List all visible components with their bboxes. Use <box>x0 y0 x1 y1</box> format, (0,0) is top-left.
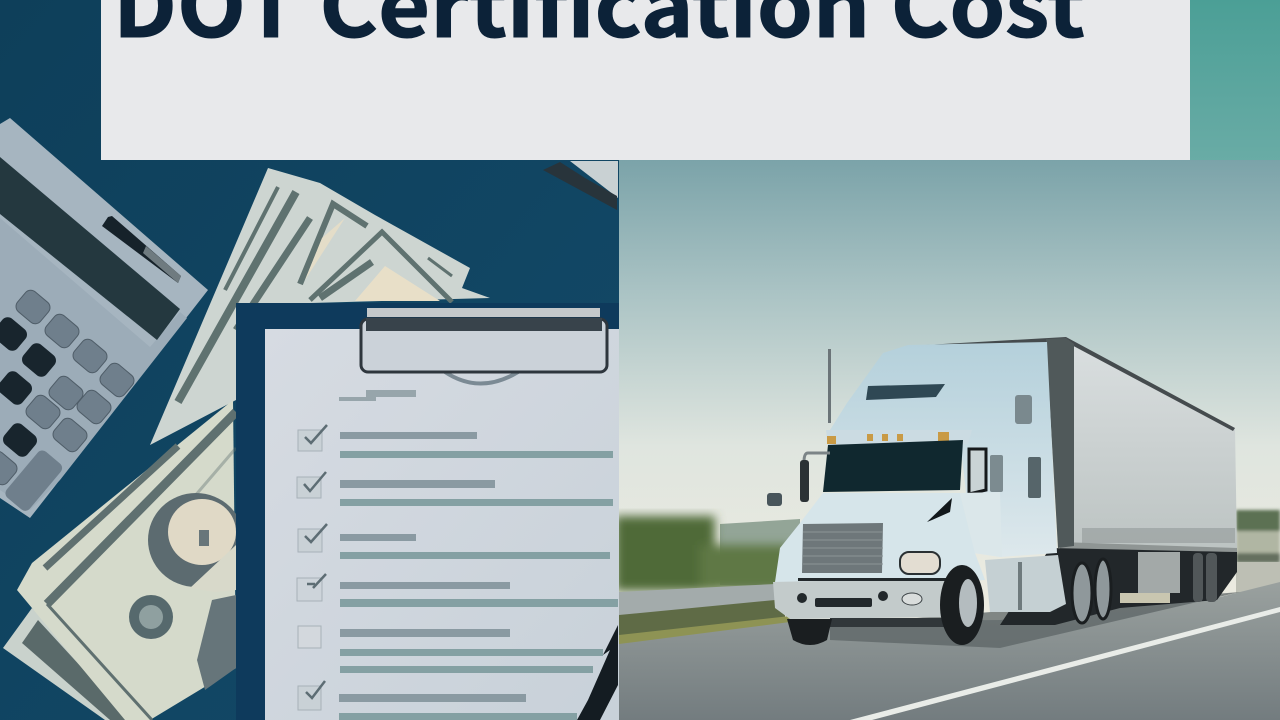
amber lights <box>827 432 949 444</box>
row 6 <box>298 681 577 720</box>
clip top <box>367 308 600 317</box>
pen <box>577 625 618 720</box>
heading line <box>339 390 416 401</box>
cab upper <box>830 342 1057 557</box>
front right wheel <box>940 565 984 645</box>
seal <box>129 595 173 639</box>
background: teal corner <box>619 0 1280 165</box>
checklist rows <box>297 425 618 720</box>
hood <box>775 493 985 585</box>
trailer bottom rail <box>1060 542 1237 552</box>
row 4 <box>297 574 618 607</box>
warm paper patches <box>355 266 440 301</box>
display <box>0 157 180 340</box>
side step <box>1120 593 1170 603</box>
calculator <box>0 118 208 518</box>
rear wheels <box>1193 553 1203 602</box>
bill border bands <box>45 412 236 720</box>
row 3 <box>298 524 610 559</box>
bumper <box>773 578 955 619</box>
board <box>236 303 619 720</box>
keys <box>0 287 137 488</box>
trailer pillar <box>1046 338 1074 548</box>
antenna <box>828 349 831 423</box>
truck <box>767 337 1240 648</box>
clipboard <box>236 303 619 720</box>
clip dark band <box>366 318 602 331</box>
trailer roof edge <box>908 337 1235 431</box>
large key <box>3 448 65 513</box>
clip wire shadow <box>445 372 518 384</box>
row 1 <box>298 425 613 458</box>
side window lower <box>1028 457 1041 498</box>
headlight <box>900 552 940 574</box>
underside <box>1000 548 1237 625</box>
background: navy desk <box>0 0 619 720</box>
door mirror <box>990 455 1003 492</box>
upper bill stripes <box>178 187 452 402</box>
title panel <box>101 0 1190 160</box>
calculator body <box>0 118 208 518</box>
hood vent <box>927 498 952 522</box>
solar slot <box>102 216 181 283</box>
upper bills <box>150 168 490 445</box>
side panel <box>1138 552 1180 593</box>
truck shadow <box>830 592 1240 648</box>
roof vent <box>866 384 945 400</box>
portrait <box>148 493 244 587</box>
bumper slot <box>815 598 872 607</box>
under bumper <box>830 618 950 627</box>
row 2 <box>297 472 613 506</box>
door <box>960 492 1002 557</box>
lane stripe <box>850 607 1280 720</box>
clip <box>361 319 607 372</box>
paper <box>265 329 619 720</box>
keypad deck <box>0 218 187 510</box>
panel: highway photo <box>615 160 1280 720</box>
drive wheels <box>1072 563 1092 623</box>
windshield <box>823 440 963 492</box>
torn item <box>543 161 618 210</box>
cash fan <box>3 161 618 720</box>
trailer box <box>1066 338 1237 552</box>
left mirror <box>804 453 830 462</box>
front left wheel <box>787 619 832 645</box>
grille <box>802 523 883 573</box>
back lower bill <box>3 608 140 720</box>
trailer marks <box>1082 528 1235 543</box>
steps and tanks <box>985 555 1066 612</box>
door window <box>969 449 986 494</box>
row 5 <box>298 626 603 673</box>
visor <box>826 430 972 446</box>
side window <box>1015 395 1032 424</box>
main lower bills <box>17 400 236 720</box>
